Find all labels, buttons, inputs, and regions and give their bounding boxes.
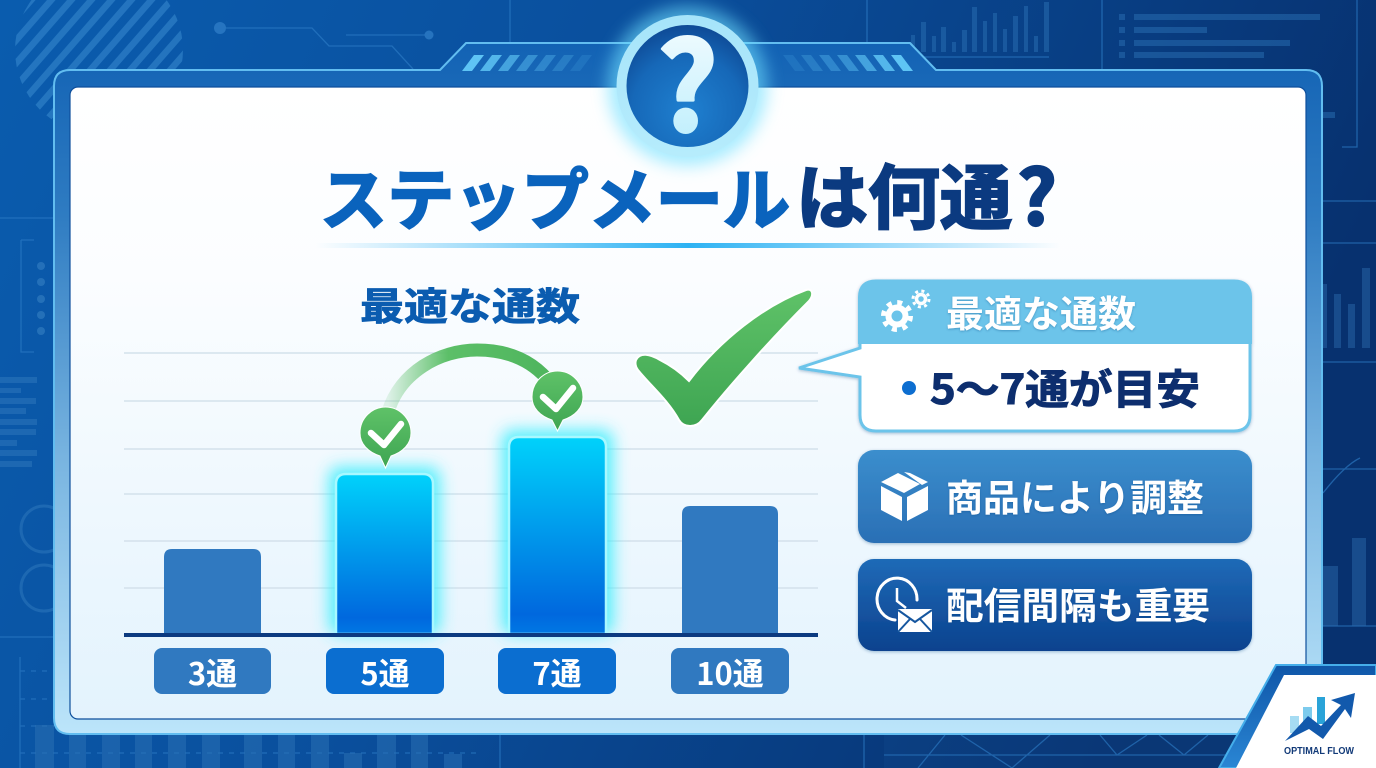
title: ? xyxy=(1017,137,1057,247)
left dots and bars xyxy=(37,262,45,335)
icon: check pin 5通 xyxy=(360,407,411,468)
tab stripes right xyxy=(783,55,913,71)
bar chart xyxy=(124,353,818,637)
axis label: 10通: 10通 xyxy=(696,649,764,694)
axis label: 10通 xyxy=(671,648,789,694)
logo bars xyxy=(1290,697,1325,733)
axis label: 3通 xyxy=(154,648,271,694)
arc connecting 5通 and 7通 xyxy=(388,350,552,412)
bottom bars xyxy=(35,725,462,768)
axis label: 3通: 3通 xyxy=(188,649,237,694)
title: は何通 xyxy=(796,143,1012,244)
axis label: 7通 xyxy=(498,648,616,694)
mini bar chart top xyxy=(911,2,1049,52)
logo: OPTIMAL FLOW xyxy=(1219,665,1376,768)
bar: 7通 highlighted xyxy=(502,430,613,634)
icon: box xyxy=(881,472,928,521)
icon: clock and envelope xyxy=(877,578,932,632)
callout heading text: 最適な通数 xyxy=(946,284,1136,338)
title underline xyxy=(316,243,1060,248)
axis label: 5通: 5通 xyxy=(360,649,410,694)
white content panel xyxy=(70,87,1306,719)
callout main text: 5～7通が目安 xyxy=(930,356,1200,416)
bullet xyxy=(902,381,916,395)
right bars xyxy=(1323,268,1370,626)
icon: gears xyxy=(884,291,929,330)
axis label: 7通: 7通 xyxy=(532,649,582,694)
tab stripes left xyxy=(462,55,592,71)
callout header xyxy=(858,280,1252,344)
callout: optimal count xyxy=(799,280,1252,431)
logo arrow xyxy=(1285,693,1355,741)
icon: question mark badge xyxy=(608,0,768,167)
button: delivery interval: 配信間隔も重要 xyxy=(946,576,1210,630)
icon: check pin 7通 xyxy=(532,371,583,431)
button: adjust by product xyxy=(858,450,1252,543)
bar: 10通 xyxy=(682,506,778,634)
left ring gauges xyxy=(21,506,67,611)
title: ステップメール xyxy=(320,147,790,244)
button: delivery interval xyxy=(858,559,1252,651)
chart heading: 最適な通数 xyxy=(360,276,580,331)
bar: 5通 highlighted xyxy=(329,467,440,634)
axis label: 5通 xyxy=(326,648,444,694)
bar: 3通 xyxy=(164,549,261,634)
logo name: OPTIMAL FLOW xyxy=(1284,746,1355,757)
icon: large green check mark xyxy=(635,290,812,426)
hatched circle xyxy=(15,0,183,119)
button: adjust by product: 商品により調整 xyxy=(946,468,1204,522)
list bars top right xyxy=(1119,14,1335,118)
title xyxy=(320,137,1057,247)
